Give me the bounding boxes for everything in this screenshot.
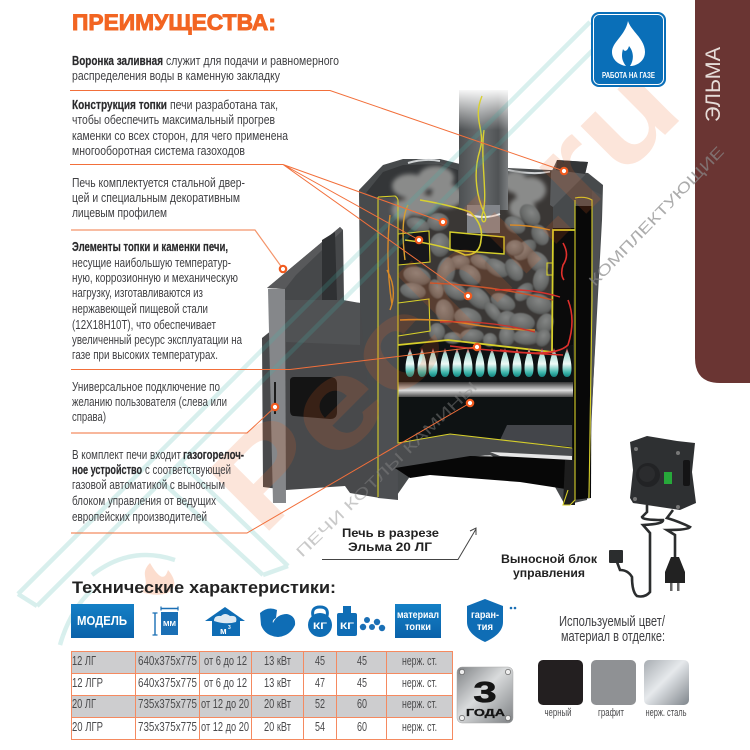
swatch: stainless steel: нерж. сталь [646,707,687,719]
table row: 12 ЛГР: 13 кВт [264,676,291,690]
table row: 12 ЛГР: 640х375х775 [138,676,197,690]
watermark: grey slogan [293,143,728,561]
table header: firebox material: топки [405,622,431,633]
burner flames [406,348,572,377]
side panel: product name [695,0,750,383]
heading: specifications: Технические характеристики: [72,578,336,597]
icon: warranty shield: гаран- [471,610,499,621]
text block: gas burner: газогорелоч- [183,447,244,462]
callout line: gas burner [71,400,473,533]
table row: 12 ЛГ: 45 [357,654,367,668]
table row: 12 ЛГ: 640х375х775 [138,654,197,668]
heading: finish colours [559,613,666,645]
heading: finish colours: Используемый цвет/ [559,613,666,630]
label: remote control block [501,554,597,580]
remote control block [609,436,696,596]
icon: power [260,609,295,637]
specifications table [72,652,452,740]
heading: finish colours: материал в отделке: [561,628,665,645]
stove: side heat exchanger with door [262,227,380,503]
table row: 20 ЛГ: 20 кВт [264,697,291,711]
text block: universal connection: Универсальное подключение по [72,379,220,394]
gas flow arrows [387,96,572,355]
label: remote control block: Выносной блок [501,554,597,566]
text block: firebox design [72,97,289,158]
text block: gas burner: газовой автоматикой с выносным [72,477,225,492]
text block: gas burner [72,447,244,524]
caption: stove section: Эльма 20 ЛГ [348,542,433,554]
table row: 12 ЛГ: 12 ЛГ [72,654,96,668]
table row: 12 ЛГ [72,654,437,668]
funnel [550,160,588,207]
table row: 12 ЛГР: 47 [315,676,325,690]
icon: dimensions [152,606,178,635]
text block: stainless elements: ную, коррозионную и механическую [72,270,238,285]
text block: gas burner: ное устройство [72,462,142,477]
icon: kettlebell weight [308,607,332,637]
watermark: grey slogan: КОМПЛЕКТУЮЩИЕ [586,143,728,290]
table row: 12 ЛГР: 45 [357,676,367,690]
text block: firebox design: Конструкция топки [72,97,167,112]
text block: gas burner: блоком управления от ведущих [72,493,216,508]
table row: 20 ЛГ: 52 [315,697,325,711]
title: ПРЕИМУЩЕСТВА: [72,10,276,35]
text block: funnel: служит для подачи и равномерного [166,53,339,68]
warranty plate: 3 years: 3 [474,677,496,709]
text block: door [72,175,245,220]
callout line: universal connection [71,404,278,433]
stones in the heater [392,166,557,349]
text block: stainless elements [72,239,243,362]
caption: stove section [342,528,439,554]
table header: model: МОДЕЛЬ [77,613,127,628]
arrow: caption to stove [322,528,476,560]
table row: 20 ЛГ: 60 [357,697,367,711]
text block: door: лицевым профилем [72,205,167,220]
table header: firebox material [395,604,441,638]
swatch: stainless steel [644,660,689,719]
icon: warranty shield: тия [477,622,493,633]
table row: 20 ЛГ: 735х375х775 [138,697,197,711]
text block: door: Печь комплектуется стальной двер- [72,175,245,190]
icon: stone weight [337,606,385,636]
table row: 20 ЛГ: нерж. ст. [402,697,437,711]
table row: 12 ЛГР: от 6 до 12 [204,676,247,690]
caption: stove section: Печь в разрезе [342,528,439,540]
stove: main body cross-section [359,159,603,505]
watermark: orange site name: Pechi.ru [183,35,705,557]
badge: works on gas [591,12,666,87]
table row: 20 ЛГР [72,720,437,734]
swatch: black: черный [544,707,572,719]
text block: firebox design: чтобы обеспечить максимальный прогрев [72,112,275,127]
table row: 12 ЛГР: 12 ЛГР [72,676,103,690]
icon: warranty shield [467,599,516,642]
text block: stainless elements: нержавеющей пищевой стали [72,301,208,316]
table row: 20 ЛГ [72,697,437,711]
text block: universal connection: справа) [72,409,106,424]
table row: 20 ЛГ: от 12 до 20 [201,697,249,711]
text block: universal connection: желанию пользователя (слева или [72,394,227,409]
icon: room volume [205,607,245,636]
table header: model [71,604,134,638]
yellow cut outlines and baffles [378,196,592,505]
table row: 20 ЛГР: нерж. ст. [402,720,437,734]
watermark: flame [142,563,174,595]
callout line: stainless elements [71,344,480,370]
table row: 20 ЛГР: 20 ЛГР [72,720,103,734]
text block: funnel: распределения воды в каменную закладку [72,68,280,83]
icon: stone weight: КГ [340,621,355,632]
text block: gas burner: европейских производителей [72,509,207,524]
badge: works on gas: РАБОТА НА ГАЗЕ [602,71,656,80]
text block: stainless elements: газе при высоких температурах. [72,347,218,362]
swatch: graphite: графит [598,707,624,719]
table row: 12 ЛГР [72,676,437,690]
text block: stainless elements: (12Х18Н10Т), что обеспечивает [72,317,216,332]
text block: firebox design: печи разработана так, [170,97,278,112]
icon: room volume: 3 [228,625,231,631]
text block: stainless elements: нагрузку, изготавливаются из [72,285,203,300]
text block: firebox design: каменки со всех сторон, для чего применена [72,128,289,143]
table row: 12 ЛГ: 45 [315,654,325,668]
text block: gas burner: В комплект печи входит [72,447,181,462]
callout line: door [71,230,286,272]
text block: stainless elements: Элементы топки и каменки печи, [72,239,228,254]
text block: stainless elements: несущие наибольшую температур- [72,255,231,270]
table row: 20 ЛГР: от 12 до 20 [201,720,249,734]
table row: 20 ЛГР: 20 кВт [264,720,291,734]
table row: 12 ЛГ: от 6 до 12 [204,654,247,668]
table header: firebox material: материал [397,610,439,621]
text block: universal connection [72,379,227,424]
callout line: funnel [70,90,567,174]
text block: door: цей и специальным декоративным [72,190,240,205]
icon: room volume: м [220,626,227,636]
text block: gas burner: с соответствующей [145,462,231,477]
label: remote control block: управления [513,568,585,580]
icon: kettlebell weight: КГ [313,621,328,632]
warranty plate: 3 years [457,667,513,723]
table row: 20 ЛГР: 54 [315,720,325,734]
swatch: black [538,660,583,719]
side panel: product name: ЭЛЬМА [702,47,725,122]
watermark: grey slogan: ПЕЧИ КОТЛЫ КАМИНЫ [293,378,481,561]
flue pipe [455,88,512,233]
watermark: teal logo [18,22,600,645]
swatch: graphite [591,660,636,719]
warranty plate: 3 years: ГОДА [466,708,505,719]
icon: dimensions: ММ [163,619,176,628]
text block: funnel [72,53,339,83]
text block: funnel: Воронка заливная [72,53,163,68]
text block: stainless elements: увеличенный ресурс эксплуатации на [72,332,243,347]
table row: 20 ЛГР: 735х375х775 [138,720,197,734]
table row: 20 ЛГР: 60 [357,720,367,734]
text block: firebox design: многооборотная система газоходов [72,143,245,158]
table row: 12 ЛГ: 13 кВт [264,654,291,668]
table row: 20 ЛГ: 20 ЛГ [72,697,96,711]
table row: 12 ЛГ: нерж. ст. [402,654,437,668]
table row: 12 ЛГР: нерж. ст. [402,676,437,690]
callout lines: firebox design [70,164,471,299]
